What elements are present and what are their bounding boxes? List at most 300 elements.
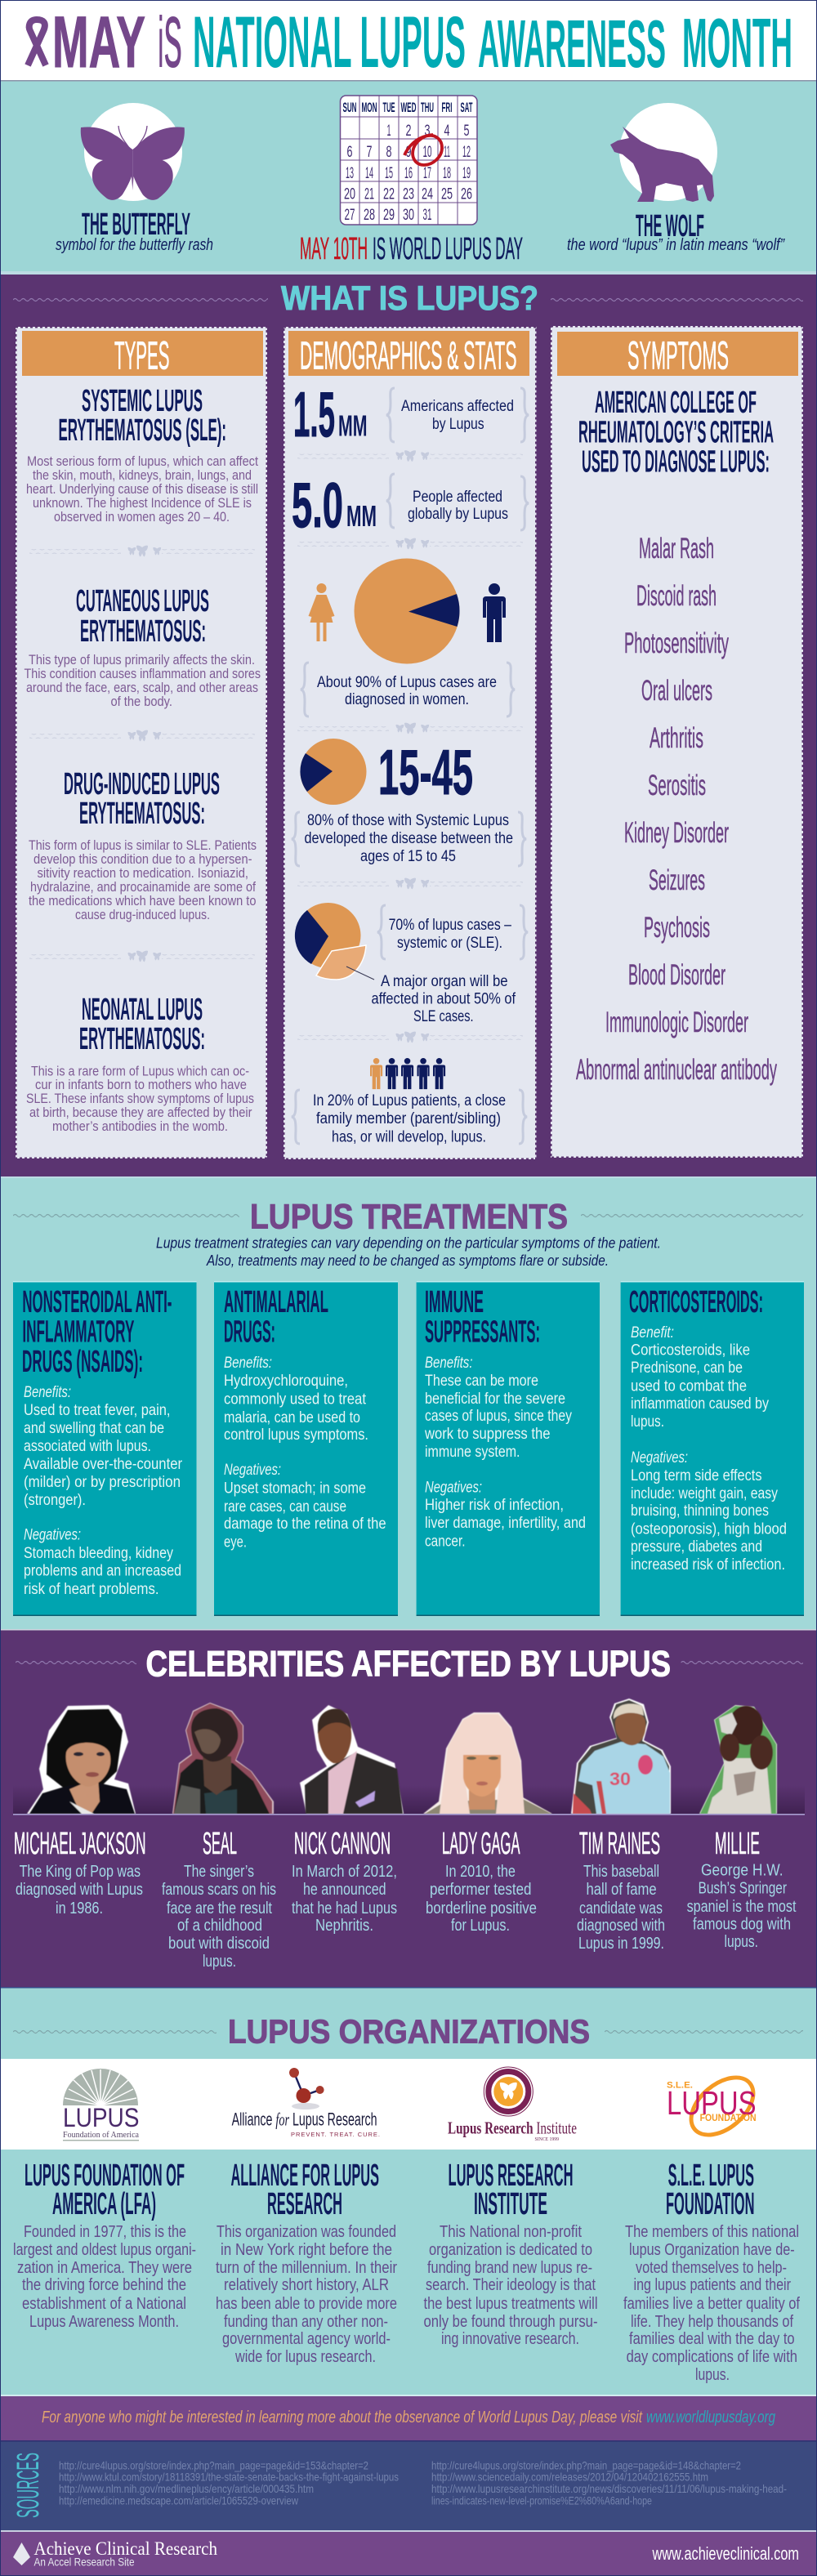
footer: sources: SOURCES <box>11 2453 46 2518</box>
section: lupus treatments <box>0 1176 817 1630</box>
org: Alliance for Lupus Research: This organization was founded <box>217 2223 396 2241</box>
photo: Tim Raines <box>571 1699 671 1814</box>
org: Lupus Foundation of America: AMERICA (LFA) <box>52 2187 156 2221</box>
chart: ages 15 to 45: 15-45 <box>378 736 473 808</box>
symptoms criteria heading <box>578 386 774 479</box>
type: systemic lupus <box>26 384 258 525</box>
icon: Achieve logo diamond <box>13 2543 30 2565</box>
org: Lupus Research Institute <box>423 2159 598 2348</box>
card: immune suppressants: immune system. <box>425 1444 520 1461</box>
org: Alliance for Lupus Research: governmental agency world- <box>222 2330 391 2348</box>
stat: 5.0 MM globally: People affected <box>413 489 502 506</box>
org: Alliance for Lupus Research: wide for lupus research. <box>234 2348 376 2366</box>
footer: brand bar <box>0 2530 817 2576</box>
org: SLE Lupus Foundation: lupus. <box>695 2366 730 2384</box>
celebrity: Millie: George H.W. <box>701 1862 784 1880</box>
celebrity: Nick Cannon <box>292 1827 397 1935</box>
photo: Tim Raines: 30 <box>609 1769 631 1789</box>
card: immune suppressants: work to suppress the <box>424 1426 551 1443</box>
type: systemic lupus: observed in women ages 20 – 40. <box>54 510 230 525</box>
heading: lupus organizations: LUPUS ORGANIZATIONS <box>228 2013 590 2051</box>
card: immune suppressants: These can be more <box>425 1373 538 1390</box>
calendar: 10 <box>423 144 431 161</box>
card: immune suppressants: Higher risk of infection, <box>425 1497 564 1514</box>
logo: Alliance for Lupus Research <box>232 2068 380 2138</box>
card: NSAIDs: (milder) or by prescription <box>24 1474 181 1491</box>
org: Lupus Research Institute: only be found through pursu- <box>423 2313 598 2331</box>
type: drug-induced lupus: hydralazine, and procainamide are some of <box>30 880 256 895</box>
calendar: 23 <box>403 186 414 203</box>
card: corticosteroids: (osteoporosis), high blood <box>631 1521 787 1538</box>
icon: woman <box>309 583 335 641</box>
calendar: 8 <box>386 144 392 161</box>
type: drug-induced lupus: sitivity reaction to medication. Isoniazid, <box>38 866 248 881</box>
heading: May 10th is World Lupus Day: MAY 10TH <box>300 232 368 266</box>
card: NSAIDs: Negatives: <box>24 1527 81 1544</box>
card: corticosteroids: lupus. <box>631 1413 664 1431</box>
celebrity: Seal: face are the result <box>167 1900 272 1917</box>
chart: 20 percent family member people icons <box>292 1058 527 1146</box>
stat: 1.5 MM Americans: Americans affected <box>401 398 514 415</box>
logo band <box>0 2059 817 2150</box>
section: celebrities affected by lupus <box>0 1629 817 1988</box>
org: Lupus Foundation of America: largest and oldest lupus organi- <box>13 2241 196 2259</box>
card: immune suppressants: Negatives: <box>425 1479 482 1497</box>
caption: butterfly: symbol for the butterfly rash <box>56 236 213 254</box>
card: NSAIDs: risk of heart problems. <box>24 1581 158 1598</box>
footer: world lupus day callout: www.worldlupusday.org <box>646 2409 775 2426</box>
type: systemic lupus: SYSTEMIC LUPUS <box>82 384 203 418</box>
intro text: treatments: Lupus treatment strategies can vary depending on the particular symptoms of the patient. <box>156 1235 661 1252</box>
calendar: 17 <box>423 165 431 182</box>
type: drug-induced lupus: ERYTHEMATOSUS: <box>79 797 205 831</box>
symptoms list: Oral ulcers <box>641 675 712 707</box>
card: NSAIDs: Used to treat fever, pain, <box>24 1402 170 1419</box>
card: antimalarial drugs: damage to the retina of the <box>224 1516 386 1533</box>
card: immune suppressants <box>417 1281 600 1616</box>
stat: 5.0 MM globally: globally by Lupus <box>408 506 508 523</box>
calendar: 11 <box>444 144 450 161</box>
intro text: treatments <box>156 1235 661 1269</box>
card: NSAIDs <box>13 1281 196 1616</box>
celebrity: Tim Raines: hall of fame <box>587 1881 657 1899</box>
type: drug-induced lupus <box>29 767 257 922</box>
card: immune suppressants: cancer. <box>425 1533 466 1551</box>
heading: May 10th is World Lupus Day <box>300 232 523 266</box>
celebrity: Millie: Bush’s Springer <box>699 1880 787 1898</box>
calendar: SAT <box>461 100 473 115</box>
logo: Lupus Research Institute: SINCE 1999 <box>534 2137 559 2142</box>
org: Alliance for Lupus Research: relatively short history, ALR <box>224 2276 389 2294</box>
card: NSAIDs: DRUGS (NSAIDS): <box>22 1345 143 1379</box>
celebrity: Tim Raines: diagnosed with <box>577 1917 665 1935</box>
symptoms list: Seizures <box>649 864 705 896</box>
footer: world lupus day callout <box>0 2395 817 2440</box>
card: corticosteroids: inflammation caused by <box>631 1395 769 1413</box>
calendar: 7 <box>366 144 373 161</box>
card: NSAIDs: associated with lupus. <box>24 1438 151 1455</box>
card: immune suppressants: beneficial for the severe <box>425 1391 565 1408</box>
org: Lupus Foundation of America: zation in America. They were <box>17 2259 192 2277</box>
celebrity: Seal <box>162 1827 276 1971</box>
celebrity: Lady Gaga: In 2010, the <box>445 1863 516 1881</box>
stat: 5.0 MM globally <box>292 469 529 541</box>
card: antimalarial drugs: control lupus symptoms. <box>224 1426 368 1444</box>
chart: 20 percent family member people icons: has, or will develop, lupus. <box>332 1129 486 1146</box>
org: Lupus Research Institute: This National non-profit <box>440 2223 582 2241</box>
calendar: SUN <box>343 100 356 115</box>
celebrity: Michael Jackson: in 1986. <box>56 1900 103 1917</box>
card: corticosteroids: Prednisone, can be <box>631 1359 743 1377</box>
chart: ages 15 to 45 <box>292 736 526 866</box>
title: May is National Lupus Awareness Month: MAY <box>52 1 145 83</box>
calendar: 22 <box>383 186 395 203</box>
symptoms list <box>576 533 777 1086</box>
card: immune suppressants: Benefits: <box>425 1355 472 1372</box>
celebrity: Lady Gaga: borderline positive <box>426 1900 537 1917</box>
symptoms list: Serositis <box>648 770 706 801</box>
org: Alliance for Lupus Research: in New York right before the <box>221 2241 392 2259</box>
org: Alliance for Lupus Research <box>216 2159 397 2366</box>
calendar: 31 <box>423 207 431 224</box>
org: Lupus Foundation of America: Lupus Awareness Month. <box>29 2313 179 2331</box>
org: Lupus Foundation of America: establishment of a National <box>22 2295 186 2313</box>
intro band: symbols and world lupus day: THE BUTTERFLY <box>82 208 190 242</box>
card: antimalarial drugs: Hydroxychloroquine, <box>224 1373 348 1390</box>
type: cutaneous lupus: ERYTHEMATOSUS: <box>80 614 206 649</box>
section: celebrities affected by lupus: NICK CANNON <box>294 1827 391 1861</box>
symptoms list: Blood Disorder <box>628 959 725 991</box>
celebrity: Nick Cannon: that he had Lupus <box>292 1900 397 1917</box>
type: neonatal lupus: mother’s antibodies in the womb. <box>52 1119 228 1134</box>
chart: 90 percent diagnosed in women: About 90% of Lupus cases are <box>317 674 497 691</box>
panel heading: demographics and stats <box>288 331 529 377</box>
celebrity: Lady Gaga: for Lupus. <box>451 1917 510 1935</box>
card: NSAIDs: and swelling that can be <box>24 1420 164 1437</box>
calendar: 13 <box>346 165 354 182</box>
footer: sources: lines-indicates-new-level-promise%E2%80%A6and-hope <box>431 2494 652 2507</box>
card: antimalarial drugs <box>214 1281 398 1616</box>
icon: awareness ribbon <box>28 20 46 65</box>
panel heading: types <box>22 331 263 377</box>
card: corticosteroids: include: weight gain, easy <box>631 1485 778 1502</box>
card: NSAIDs: problems and an increased <box>24 1563 181 1580</box>
type: cutaneous lupus: This condition causes inflammation and sores <box>25 667 261 681</box>
photo: Lady Gaga <box>423 1712 552 1814</box>
card: corticosteroids: Corticosteroids, like <box>631 1342 750 1359</box>
logo: Alliance for Lupus Research: Alliance for Lupus Research <box>232 2109 377 2130</box>
logo: Lupus Research Institute: Lupus Research Institute <box>448 2118 577 2138</box>
calendar: 14 <box>365 165 373 182</box>
type: drug-induced lupus: DRUG-INDUCED LUPUS <box>64 767 220 801</box>
calendar: 26 <box>461 186 472 203</box>
chart: 70 percent systemic, major organ 50 percent: 70% of lupus cases – <box>389 917 511 934</box>
type: neonatal lupus <box>26 993 254 1134</box>
title: May is National Lupus Awareness Month: NATIONAL LUPUS <box>193 1 466 83</box>
type: cutaneous lupus: CUTANEOUS LUPUS <box>76 584 209 618</box>
card: antimalarial drugs: Upset stomach; in some <box>224 1480 366 1497</box>
calendar: 24 <box>422 186 433 203</box>
footer: sources: http://www.sciencedaily.com/releases/2012/04/120402162555.htm <box>431 2471 708 2484</box>
chart: 70 percent systemic, major organ 50 percent: systemic or (SLE). <box>397 935 502 952</box>
type: systemic lupus: the skin, mouth, kidneys, brain, lungs, and <box>33 468 252 483</box>
card: antimalarial drugs: Benefits: <box>224 1355 272 1372</box>
org: Lupus Research Institute: INSTITUTE <box>474 2187 547 2221</box>
card: antimalarial drugs: ANTIMALARIAL <box>224 1285 328 1319</box>
calendar: 5 <box>464 123 469 140</box>
type: neonatal lupus: ERYTHEMATOSUS: <box>79 1022 205 1056</box>
icon: man <box>483 583 506 642</box>
type: cutaneous lupus: of the body. <box>111 694 172 709</box>
type: systemic lupus: Most serious form of lupus, which can affect <box>27 454 258 469</box>
type: drug-induced lupus: the medications which have been known to <box>29 894 257 909</box>
celebrity: Nick Cannon: he announced <box>303 1881 386 1899</box>
type: neonatal lupus: SLE. These infants show symptoms of lupus <box>26 1092 254 1106</box>
header band <box>0 0 817 87</box>
footer: sources: http://cure4lupus.org/store/index.php?main_page=page&id=148&chapter=2 <box>431 2459 741 2472</box>
brand name: Achieve Clinical Research <box>34 2538 217 2559</box>
card: corticosteroids: Long term side effects <box>631 1467 761 1484</box>
celebrity: Seal: of a childhood <box>177 1917 262 1935</box>
heading: what is lupus: WHAT IS LUPUS? <box>281 279 538 317</box>
celebrity: Seal: SEAL <box>203 1827 237 1861</box>
calendar: 16 <box>404 165 413 182</box>
celebrity: Millie: famous dog with <box>693 1916 791 1934</box>
footer: world lupus day callout: For anyone who might be interested in learning more about the observance of World Lupus Day, please visit <box>42 2409 643 2426</box>
logo: SLE Lupus Foundation <box>667 2066 764 2146</box>
panel: demographics and stats <box>283 327 536 1159</box>
footer: sources: http://cure4lupus.org/store/index.php?main_page=page&id=153&chapter=2 <box>59 2459 368 2472</box>
photo: Nick Cannon <box>300 1705 404 1814</box>
intro band: symbols and world lupus day <box>0 82 817 275</box>
heading: celebrities: CELEBRITIES AFFECTED BY LUPUS <box>145 1645 671 1685</box>
calendar: 18 <box>443 165 451 182</box>
card: NSAIDs: (stronger). <box>24 1492 86 1509</box>
chart: 90 percent diagnosed in women <box>301 559 515 717</box>
stat: 5.0 MM globally: MM <box>346 499 377 533</box>
celebrity: Seal: lupus. <box>203 1953 236 1971</box>
symptoms list: Arthritis <box>650 722 703 754</box>
calendar: 2 <box>405 123 412 140</box>
logo: SLE Lupus Foundation: FOUNDATION <box>700 2112 757 2123</box>
chart: 90 percent diagnosed in women: diagnosed in women. <box>345 691 469 708</box>
calendar: 27 <box>345 207 355 224</box>
calendar: 1 <box>387 123 391 140</box>
celebrity: Seal: famous scars on his <box>162 1881 276 1899</box>
panel heading: symptoms <box>557 332 798 377</box>
type: systemic lupus: heart. Underlying cause of this disease is still <box>26 482 258 497</box>
type: neonatal lupus: cur in infants born to mothers who have <box>35 1078 247 1092</box>
chart: ages 15 to 45: developed the disease between the <box>304 830 513 847</box>
calendar: 6 <box>346 144 353 161</box>
calendar: 21 <box>364 186 374 203</box>
stat: 1.5 MM Americans <box>293 378 529 450</box>
org: Lupus Foundation of America: Founded in 1977, this is the <box>24 2223 186 2241</box>
card: corticosteroids: Benefit: <box>631 1324 674 1342</box>
logo: Lupus Foundation of America: LUPUS <box>63 2103 139 2132</box>
stat: 1.5 MM Americans: by Lupus <box>432 416 484 433</box>
footer: sources: http://emedicine.medscape.com/article/1065529-overview <box>59 2494 299 2507</box>
symptoms list: Malar Rash <box>639 533 714 565</box>
org: Lupus Research Institute: LUPUS RESEARCH <box>448 2159 574 2193</box>
footer: sources: http://www.ktul.com/story/18118391/the-state-senate-backs-the-fight-against-lupus <box>59 2471 399 2484</box>
card: corticosteroids <box>621 1281 804 1616</box>
heading: lupus treatments: LUPUS TREATMENTS <box>250 1198 568 1237</box>
card: antimalarial drugs: eye. <box>224 1534 247 1551</box>
org: Lupus Research Institute: ing innovative research. <box>441 2330 579 2348</box>
section: what is lupus <box>0 275 817 1177</box>
card: corticosteroids: Negatives: <box>631 1449 688 1467</box>
calendar: 29 <box>383 207 395 224</box>
celebrity: Tim Raines: This baseball <box>583 1863 659 1881</box>
org: Lupus Research Institute: organization is dedicated to <box>429 2241 592 2259</box>
symptoms list: Photosensitivity <box>624 627 729 659</box>
section: lupus organizations <box>0 1987 817 2395</box>
calendar: 28 <box>364 207 375 224</box>
card: immune suppressants: SUPPRESSANTS: <box>425 1315 540 1350</box>
section: what is lupus: DEMOGRAPHICS & STATS <box>300 335 516 377</box>
section: celebrities affected by lupus: TIM RAINES <box>579 1827 660 1861</box>
brand tagline: An Accel Research Site <box>34 2556 135 2569</box>
panel: symptoms <box>551 326 803 1158</box>
org: Alliance for Lupus Research: turn of the millennium. In their <box>216 2259 397 2277</box>
intro band: symbols and world lupus day: IS WORLD LUPUS DAY <box>373 232 523 266</box>
type: cutaneous lupus: around the face, ears, scalp, and other areas <box>26 681 258 695</box>
stat: 1.5 MM Americans: 1.5 <box>293 378 335 450</box>
chart: 70 percent systemic, major organ 50 percent: affected in about 50% of <box>371 991 516 1008</box>
logo: SLE Lupus Foundation: LUPUS <box>667 2084 757 2122</box>
celebrity: Lady Gaga: performer tested <box>430 1881 531 1899</box>
type: neonatal lupus: NEONATAL LUPUS <box>82 993 203 1027</box>
calendar <box>340 96 477 225</box>
section: lupus organizations: LUPUS FOUNDATION OF <box>25 2159 185 2193</box>
type: neonatal lupus: at birth, because they are affected by their <box>29 1105 252 1120</box>
org: Alliance for Lupus Research: funding than any other non- <box>224 2313 388 2331</box>
calendar: 12 <box>462 144 471 161</box>
calendar: 4 <box>444 123 450 140</box>
calendar: 25 <box>441 186 453 203</box>
celebrity: Millie: lupus. <box>724 1933 758 1951</box>
chart: ages 15 to 45: 80% of those with Systemic Lupus <box>307 812 509 829</box>
celebrity: Seal: bout with discoid <box>168 1935 270 1953</box>
card: NSAIDs: Stomach bleeding, kidney <box>24 1545 173 1562</box>
heading: lupus treatments <box>13 1198 803 1237</box>
org: Lupus Foundation of America <box>13 2159 196 2331</box>
calendar: 30 <box>403 207 414 224</box>
chart: 20 percent family member people icons: In 20% of Lupus patients, a close <box>313 1092 506 1109</box>
calendar: 9 <box>405 144 412 161</box>
photo: Millie the spaniel <box>699 1705 777 1814</box>
org: Lupus Research Institute: funding brand new lupus re- <box>427 2259 592 2277</box>
stat: 5.0 MM globally: 5.0 <box>292 469 343 541</box>
footer: sources: http://www.nlm.nih.gov/medlineplus/ency/article/000435.htm <box>59 2482 314 2495</box>
celebrity: Lady Gaga <box>426 1827 537 1935</box>
logo: Alliance for Lupus Research: PREVENT. TREAT. CURE. <box>291 2131 380 2138</box>
type: systemic lupus: ERYTHEMATOSUS (SLE): <box>59 413 226 448</box>
calendar: MON <box>361 100 377 115</box>
org: Lupus Research Institute: search. Their ideology is that <box>426 2276 596 2294</box>
calendar: 19 <box>462 165 471 182</box>
stat: 1.5 MM Americans: MM <box>338 408 368 443</box>
intro text: treatments: Also, treatments may need to be changed as symptoms flare or subside. <box>206 1252 609 1269</box>
card: corticosteroids: increased risk of infection. <box>631 1556 785 1574</box>
icon: butterfly <box>81 103 185 201</box>
org: Lupus Research Institute: the best lupus treatments will <box>423 2295 598 2313</box>
type: drug-induced lupus: cause drug-induced lupus. <box>75 908 210 922</box>
type: cutaneous lupus: This type of lupus primarily affects the skin. <box>29 653 255 667</box>
celebrity: Nick Cannon: In March of 2012, <box>292 1863 397 1881</box>
card: NSAIDs: NONSTEROIDAL ANTI- <box>22 1285 172 1319</box>
card: antimalarial drugs: malaria, can be used to <box>224 1409 360 1426</box>
section: celebrities affected by lupus: MICHAEL JACKSON <box>14 1827 145 1861</box>
calendar: TUE <box>382 100 395 115</box>
calendar: THU <box>421 100 434 115</box>
logo: Lupus Research Institute <box>448 2067 577 2142</box>
celebrity: Tim Raines <box>577 1827 665 1953</box>
celebrity: Michael Jackson: diagnosed with Lupus <box>16 1881 143 1899</box>
type: drug-induced lupus: This form of lupus is similar to SLE. Patients <box>29 838 257 853</box>
photo: Michael Jackson <box>27 1705 136 1814</box>
calendar: FRI <box>441 100 453 115</box>
photo: Seal <box>172 1703 274 1814</box>
type: systemic lupus: unknown. The highest Incidence of SLE is <box>33 496 252 511</box>
card: NSAIDs: Benefits: <box>24 1384 71 1401</box>
org: Lupus Foundation of America: the driving force behind the <box>22 2276 186 2294</box>
org: Alliance for Lupus Research: RESEARCH <box>267 2187 342 2221</box>
celebrity: Michael Jackson: The King of Pop was <box>20 1863 141 1881</box>
calendar: 3 <box>425 123 430 140</box>
type: cutaneous lupus <box>25 584 261 709</box>
footer: sources <box>0 2440 817 2530</box>
type: drug-induced lupus: develop this condition due to a hypersen- <box>33 852 252 867</box>
chart: 70 percent systemic, major organ 50 percent <box>295 903 528 1025</box>
chart: 70 percent systemic, major organ 50 percent: SLE cases. <box>413 1008 474 1025</box>
icon: red circle around May 10 <box>404 135 442 165</box>
card: antimalarial drugs: commonly used to treat <box>224 1391 367 1409</box>
logo: Lupus Foundation of America: Foundation of America <box>63 2130 139 2140</box>
card: corticosteroids: pressure, diabetes and <box>631 1538 762 1556</box>
type: neonatal lupus: This is a rare form of Lupus which can oc- <box>31 1064 249 1078</box>
celebrity: Seal: The singer’s <box>184 1863 254 1881</box>
celebrity: Lady Gaga: LADY GAGA <box>442 1827 520 1861</box>
chart: ages 15 to 45: ages of 15 to 45 <box>360 848 456 865</box>
card: antimalarial drugs: Negatives: <box>224 1462 281 1479</box>
logo: SLE Lupus Foundation: S.L.E. <box>667 2081 693 2091</box>
card: NSAIDs: INFLAMMATORY <box>22 1315 134 1350</box>
card: antimalarial drugs: DRUGS: <box>224 1315 275 1350</box>
heading: lupus organizations <box>13 2013 803 2051</box>
card: immune suppressants: cases of lupus, since they <box>425 1408 572 1425</box>
celebrity: Tim Raines: candidate was <box>579 1900 663 1917</box>
calendar: WED <box>400 100 417 115</box>
celebrity: Tim Raines: Lupus in 1999. <box>578 1935 664 1953</box>
symptoms list: Psychosis <box>644 912 710 944</box>
org: SLE Lupus Foundation: voted themselves to help- <box>636 2259 787 2277</box>
panel heading: types: TYPES <box>114 335 170 377</box>
panel: types <box>16 327 267 1159</box>
intro band: symbols and world lupus day: THE WOLF <box>636 209 704 243</box>
calendar: 15 <box>385 165 393 182</box>
chart: 70 percent systemic, major organ 50 percent: A major organ will be <box>381 973 508 990</box>
card: corticosteroids: used to combat the <box>631 1377 747 1395</box>
card: NSAIDs: Available over-the-counter <box>24 1456 183 1473</box>
card: immune suppressants: IMMUNE <box>425 1285 484 1319</box>
card: antimalarial drugs: rare cases, can cause <box>224 1498 346 1516</box>
heading: what is lupus <box>13 279 803 317</box>
org: SLE Lupus Foundation <box>623 2159 800 2384</box>
celebrity: Michael Jackson <box>14 1827 145 1917</box>
calendar: 20 <box>344 186 355 203</box>
